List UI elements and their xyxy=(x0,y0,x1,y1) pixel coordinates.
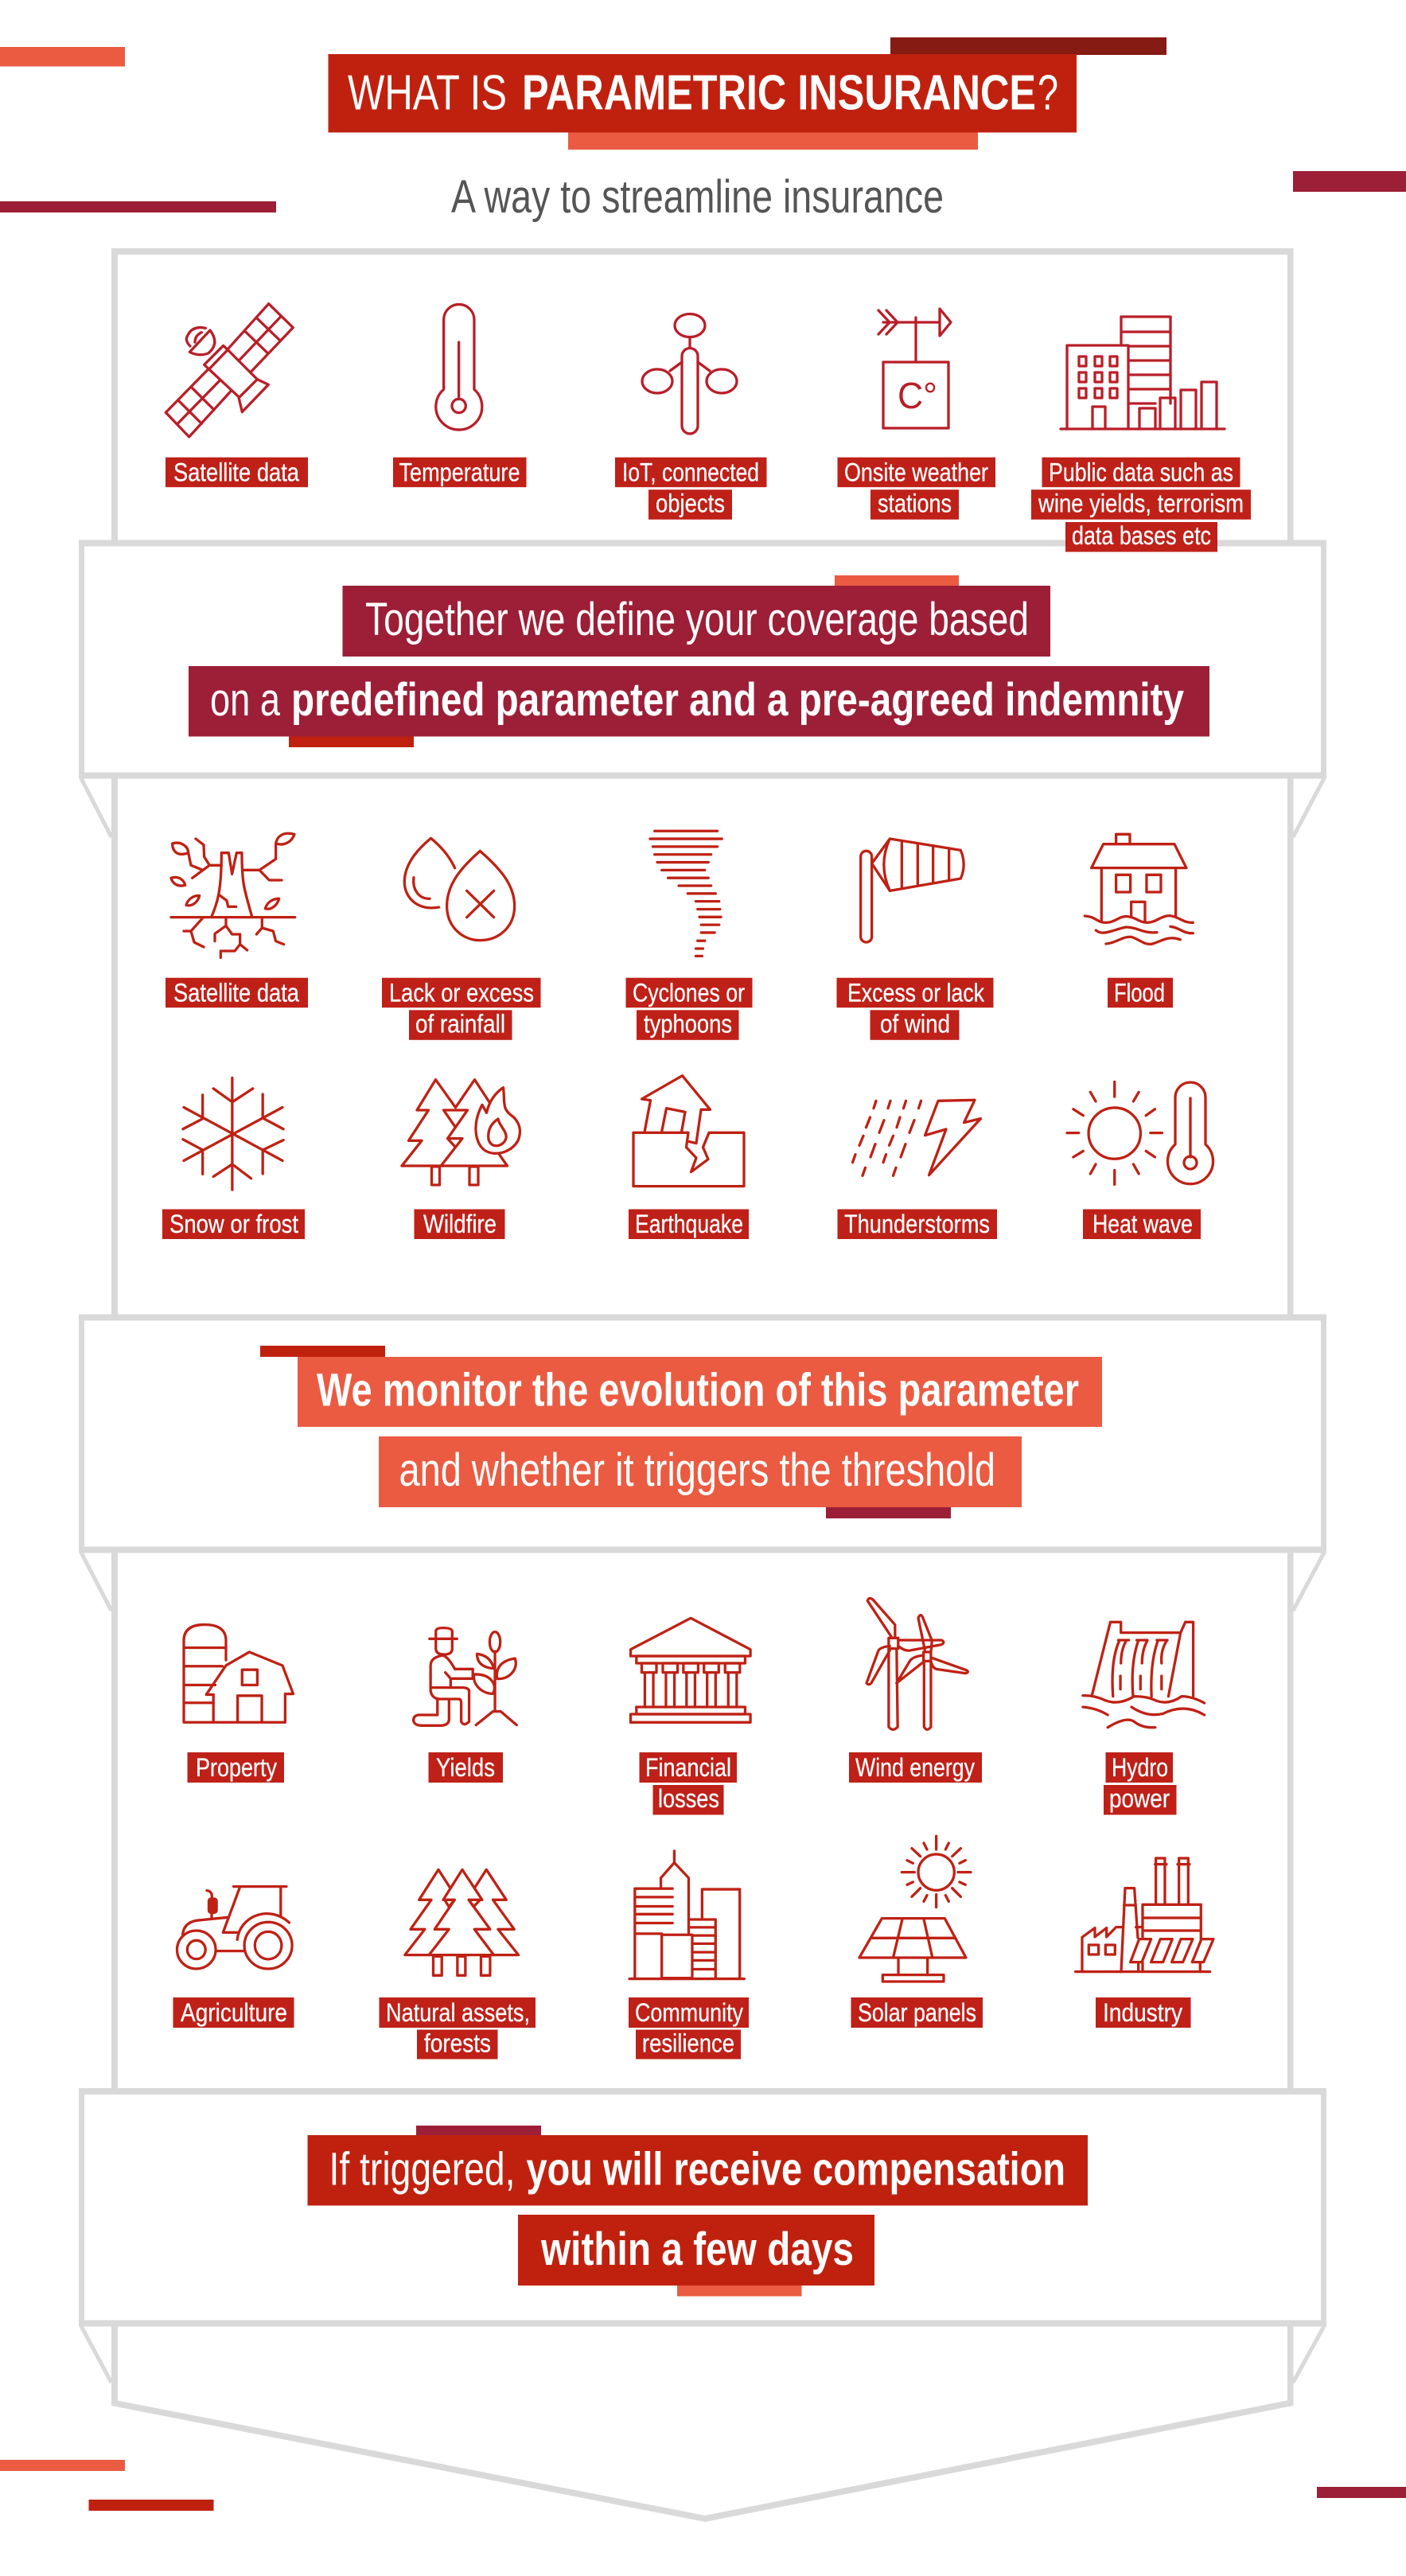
icon: satellite xyxy=(166,304,293,437)
title: WHAT IS xyxy=(348,65,507,121)
label: financial losses: Financial xyxy=(645,1753,731,1782)
label: hydro power xyxy=(1104,1752,1176,1814)
label: industry: Industry xyxy=(1103,1998,1182,2027)
heading line 1: We monitor the evolution of this parameter xyxy=(317,1364,1079,1417)
icon: water drops xyxy=(404,838,515,941)
decorative bars: bottom xyxy=(0,2460,1406,2511)
icon: heat wave xyxy=(1067,1081,1213,1184)
heading line 2 xyxy=(518,2215,874,2286)
label: flood: Flood xyxy=(1114,978,1165,1007)
label: iot: objects xyxy=(656,489,725,517)
panel: perils xyxy=(162,831,1213,1239)
heading line 2: predefined parameter and a pre-agreed indemnity xyxy=(291,674,1184,726)
label: agriculture: Agriculture xyxy=(181,1998,287,2027)
label: rainfall: Lack or excess xyxy=(389,978,534,1007)
label: public data xyxy=(1031,458,1251,552)
label: onsite weather stations: Onsite weather xyxy=(844,458,988,486)
subtitle: A way to streamline insurance xyxy=(451,171,944,223)
ribbon frame xyxy=(81,248,1324,2522)
icon: city data xyxy=(1061,317,1225,429)
label: community resilience: resilience xyxy=(642,2029,734,2058)
label: public data: wine yields, terrorism xyxy=(1038,489,1244,517)
title: ? xyxy=(1038,65,1058,121)
label: thunderstorms: Thunderstorms xyxy=(844,1210,990,1238)
icon: windsock xyxy=(861,839,964,942)
icon: drought tree xyxy=(171,833,295,957)
icon: wind turbines xyxy=(867,1598,968,1729)
panel: insured assets xyxy=(173,1598,1213,2060)
label: yields: Yields xyxy=(436,1753,495,1782)
label: iot xyxy=(615,458,767,520)
panel: data sources xyxy=(79,304,1326,778)
icon: weather station: C° xyxy=(898,375,937,416)
title xyxy=(328,37,1166,150)
icon: snowflake xyxy=(183,1078,283,1190)
heading line 2 xyxy=(189,666,1209,737)
label: onsite weather stations xyxy=(837,458,995,520)
label: rainfall xyxy=(382,978,541,1040)
decorative bars: top xyxy=(0,47,1406,212)
icon: forest xyxy=(405,1869,519,1975)
icon: bank xyxy=(631,1618,750,1722)
heading line 2: and whether it triggers the threshold xyxy=(399,1444,995,1496)
label: public data: Public data such as xyxy=(1049,458,1233,486)
heading line 1: Together we define your coverage based xyxy=(365,594,1029,645)
icon: wildfire xyxy=(402,1080,520,1185)
icon: solar panel xyxy=(859,1836,971,1982)
label: community resilience: Community xyxy=(635,1998,743,2027)
heading line 1: If triggered, xyxy=(329,2144,516,2195)
label: financial losses xyxy=(640,1752,737,1814)
title: PARAMETRIC INSURANCE xyxy=(522,65,1036,121)
label: natural assets: Natural assets, xyxy=(386,1998,530,2027)
label: satellite data: Satellite data xyxy=(173,978,299,1007)
label: wind: of wind xyxy=(880,1009,950,1038)
band: monitor parameter xyxy=(79,1315,1326,1553)
label: property: Property xyxy=(196,1753,277,1782)
label: temperature: Temperature xyxy=(399,458,520,486)
label: earthquake: Earthquake xyxy=(635,1210,743,1238)
heading line 1: you will receive compensation xyxy=(527,2144,1065,2195)
label: hydro power: Hydro xyxy=(1112,1753,1168,1782)
icon: connected objects xyxy=(642,314,737,434)
heading line 2 xyxy=(379,1436,1022,1507)
heading line 1 xyxy=(298,1357,1102,1427)
icon: community city xyxy=(629,1851,744,1979)
icon: property xyxy=(184,1625,293,1722)
label: wind: Excess or lack xyxy=(847,978,985,1007)
icon: thermometer xyxy=(436,304,482,430)
label: solar panels: Solar panels xyxy=(858,1998,976,2027)
heading line 2: within a few days xyxy=(540,2223,854,2275)
heading line 2: on a xyxy=(210,674,281,726)
label: wind energy: Wind energy xyxy=(855,1753,975,1782)
icon: hydro dam xyxy=(1083,1622,1205,1728)
icon: tractor xyxy=(177,1887,292,1969)
label: wildfire: Wildfire xyxy=(423,1210,497,1238)
label: natural assets xyxy=(379,1997,536,2060)
label: public data: data bases etc xyxy=(1072,521,1211,550)
icon: yields xyxy=(414,1628,516,1725)
icon: factory xyxy=(1076,1858,1213,1972)
label: satellite data: Satellite data xyxy=(173,458,299,486)
label: hydro power: power xyxy=(1109,1784,1170,1813)
label: rainfall: of rainfall xyxy=(415,1009,505,1038)
label: community resilience xyxy=(629,1997,749,2060)
heading line 1 xyxy=(307,2135,1088,2206)
icon: tornado xyxy=(650,831,722,956)
label: heat wave: Heat wave xyxy=(1092,1210,1193,1238)
label: cyclones: typhoons xyxy=(644,1009,732,1038)
label: snow: Snow or frost xyxy=(169,1210,298,1238)
label: natural assets: forests xyxy=(424,2029,491,2058)
icon: earthquake xyxy=(633,1076,744,1187)
heading line 1 xyxy=(342,586,1050,657)
label: cyclones: Cyclones or xyxy=(633,978,745,1007)
label: cyclones xyxy=(625,978,753,1040)
icon: flooded house xyxy=(1085,834,1193,944)
band: compensation xyxy=(79,2088,1326,2327)
icon: weather station xyxy=(878,309,951,428)
label: wind xyxy=(837,978,993,1040)
icon: thunderstorm xyxy=(853,1100,980,1175)
label: onsite weather stations: stations xyxy=(878,489,952,517)
label: iot: IoT, connected xyxy=(622,458,759,486)
label: financial losses: losses xyxy=(658,1784,719,1813)
band: define coverage xyxy=(79,540,1326,778)
